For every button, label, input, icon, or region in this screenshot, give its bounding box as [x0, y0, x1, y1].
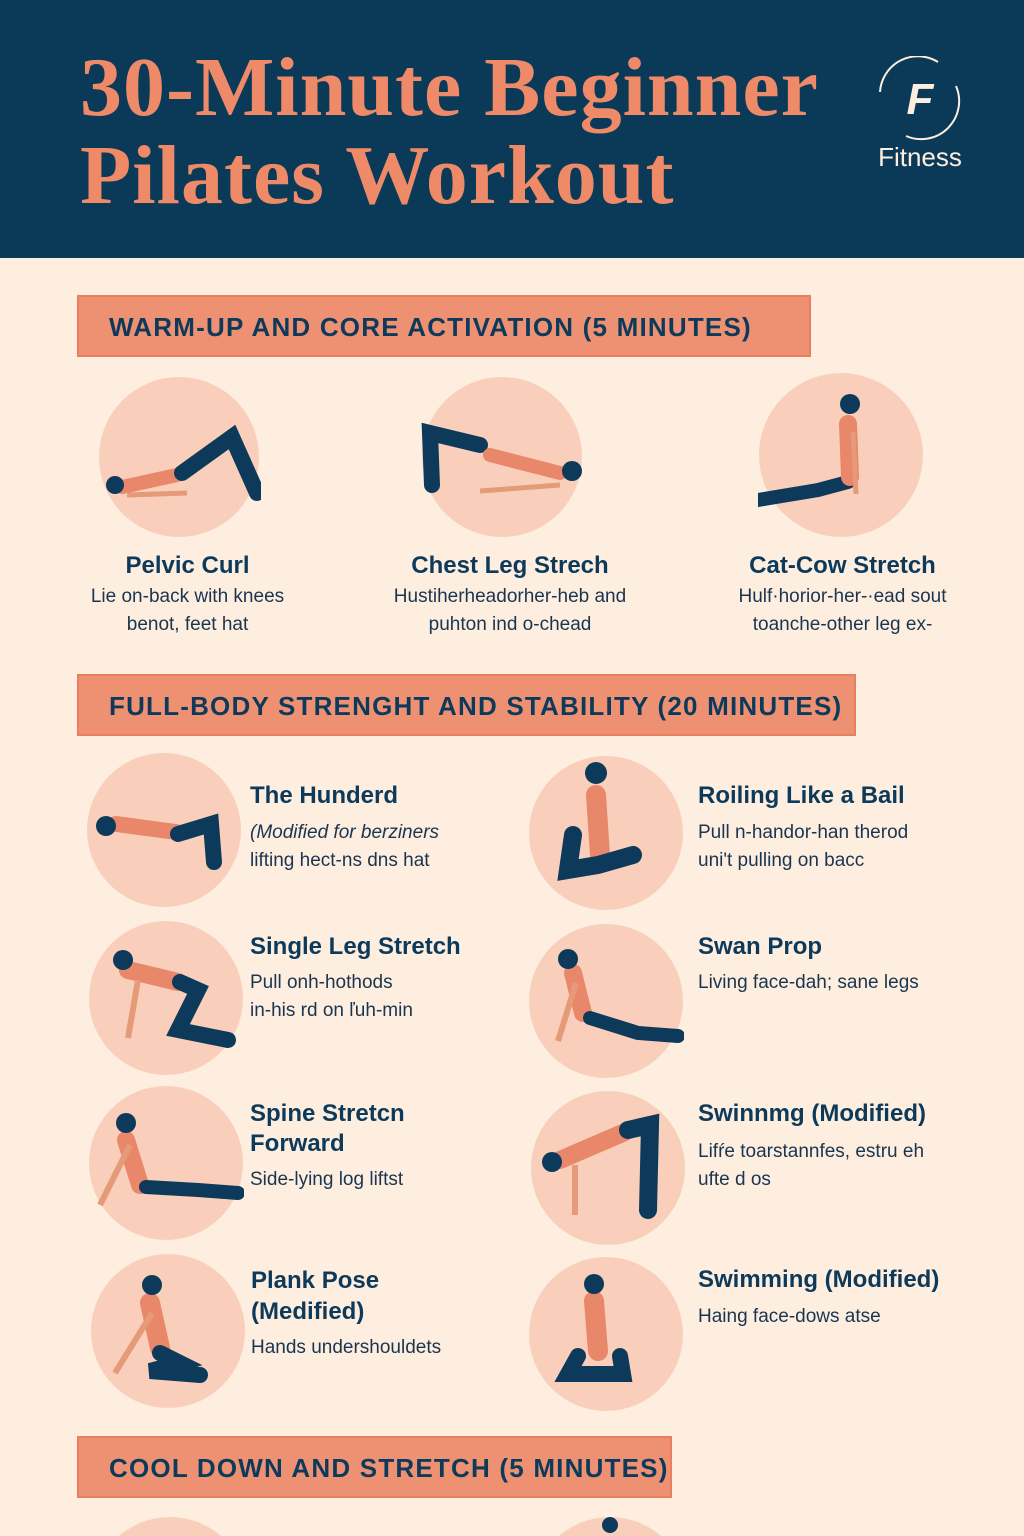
exercise: swimming modified [531, 1091, 926, 1245]
exercise: plank pose: (Medified) [251, 1298, 364, 1325]
title: 30-Minute Beginner [80, 41, 819, 134]
exercise: single leg stretch: in-his rd on ľuh-min [250, 1000, 413, 1021]
exercise: spine stretch forward: Forward [250, 1130, 345, 1157]
exercise: chest leg stretch: Chest Leg Strech [411, 552, 609, 579]
exercise: chest leg stretch [394, 377, 626, 635]
exercise: single leg stretch [89, 921, 461, 1075]
exercise: plank pose: Hands undershouldets [251, 1337, 441, 1358]
banner: cool down: COOL DOWN AND STRETCH (5 MINUTES) [109, 1453, 669, 1483]
exercise: the hundred [87, 753, 439, 907]
exercise: plank pose: Plank Pose [251, 1267, 379, 1294]
exercise: cat-cow: Cat-Cow Stretch [749, 552, 936, 579]
exercise: spine stretch forward: Side-lying log liftst [250, 1169, 403, 1190]
title [80, 41, 819, 222]
exercise: swimming modified: Swinnmg (Modified) [698, 1100, 926, 1127]
exercise: rolling like a ball: Pull n-handor-han therod [698, 822, 908, 843]
exercise: chest leg stretch: Hustiherheadorher-heb and [394, 586, 626, 607]
exercise: swimming modified 2 [529, 1257, 939, 1411]
exercise: rolling like a ball [529, 756, 908, 910]
logo [878, 56, 962, 172]
exercise: swan prop: Living face-dah; sane legs [698, 972, 919, 993]
title: Pilates Workout [80, 129, 674, 222]
exercise: the hundred: lifting hect-ns dns hat [250, 850, 430, 871]
exercise: pelvic curl: Lie on-back with knees [91, 586, 284, 607]
exercise: the hundred: (Modified for berziners [250, 822, 439, 843]
exercise: single leg stretch: Pull onh-hothods [250, 972, 393, 993]
exercise: rolling like a ball: Roiling Like a Bail [698, 782, 905, 809]
exercise: plank pose [91, 1254, 441, 1408]
banner: full-body [77, 674, 856, 736]
exercise: swimming modified: ufte d os [698, 1169, 771, 1190]
exercise: pelvic curl: Pelvic Curl [125, 552, 250, 579]
banner: warm-up [77, 295, 811, 357]
partial circles at bottom [119, 1517, 661, 1536]
exercise: swan prop: Swan Prop [698, 933, 822, 960]
banner: full-body: FULL-BODY STRENGHT AND STABILITY (20 MINUTES) [109, 691, 842, 721]
exercise: cat-cow: toanche-other leg ex- [753, 614, 932, 635]
exercise: swimming modified: Lifŕe toarstannfes, estru eh [698, 1141, 924, 1162]
exercise: cat-cow [738, 373, 947, 635]
banner: warm-up: WARM-UP AND CORE ACTIVATION (5 MINUTES) [109, 312, 752, 342]
exercise: spine stretch forward [89, 1086, 405, 1240]
exercise: chest leg stretch: puhton ind o-chead [429, 614, 591, 635]
exercise: swimming modified 2: Haing face-dows atse [698, 1306, 881, 1327]
exercise: pelvic curl [91, 377, 284, 635]
exercise: rolling like a ball: uni't pulling on bacc [698, 850, 864, 871]
banner: cool down [77, 1436, 672, 1498]
exercise: single leg stretch: Single Leg Stretch [250, 933, 461, 960]
header band [0, 0, 1024, 258]
logo: Fitness [878, 142, 962, 172]
exercise: cat-cow: Hulf·horior-her-·ead sout [738, 586, 947, 607]
exercise: swan prop [529, 924, 919, 1078]
exercise: spine stretch forward: Spine Stretcn [250, 1100, 405, 1127]
exercise: pelvic curl: benot, feet hat [127, 614, 248, 635]
exercise: the hundred: The Hunderd [250, 782, 398, 809]
logo: F [907, 75, 935, 124]
exercise: swimming modified 2: Swimming (Modified) [698, 1266, 939, 1293]
